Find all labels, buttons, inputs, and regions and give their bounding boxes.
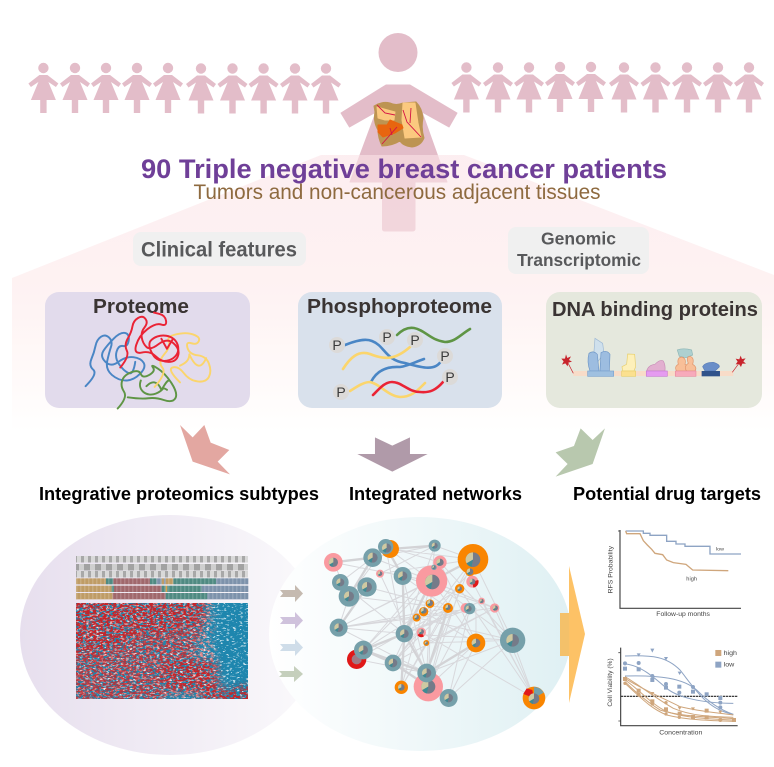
heading: integrated networks: Integrated networks [349, 484, 522, 504]
network nodes [324, 539, 545, 709]
label: genomic transcriptomic: Genomic [541, 228, 616, 248]
chart: survival curve: low [716, 546, 724, 552]
chart: cell viability: Cell Viability (%) [608, 658, 614, 707]
icon: phosphorylated peptides: P [410, 332, 420, 348]
background: pale pyramid [12, 155, 774, 432]
arrow: track arrows to network [279, 585, 303, 682]
icon: phosphorylated peptides [329, 328, 470, 400]
icon: tangled proteins [86, 313, 210, 409]
label: clinical features [133, 232, 306, 266]
icon: central patient figure [341, 33, 457, 231]
icon: phosphorylated peptides: P [332, 337, 342, 353]
panel: subtype ellipse [20, 515, 320, 755]
subtitle: Tumors and non-cancerous adjacent tissues [194, 181, 600, 204]
heading: potential drug targets: Potential drug targets [573, 484, 761, 504]
label: genomic transcriptomic: Transcriptomic [517, 250, 641, 270]
arrow: big orange arrow [560, 566, 585, 703]
icon: tumor tissue [374, 102, 424, 147]
arrow: to networks [357, 437, 428, 472]
icon: phosphorylated peptides: P [440, 348, 450, 364]
icon: phosphorylated peptides: P [336, 384, 346, 400]
heading: phosphoproteome: Phosphoproteome [307, 296, 492, 318]
title: 90 Triple negative breast cancer patients [141, 154, 667, 184]
chart: survival curve: Follow-up months [656, 611, 711, 618]
chart: cell viability: Concentration [659, 730, 703, 737]
network edges thin [333, 546, 534, 698]
arrow: to drug targets [556, 428, 605, 477]
heading: proteome: Proteome [93, 296, 189, 318]
label: clinical features: Clinical features [141, 238, 297, 262]
chart: survival curve [608, 530, 741, 618]
icon: phosphorylated peptides: P [382, 329, 392, 345]
heading: DNA binding proteins: DNA binding proteins [552, 299, 758, 321]
chart: cell viability: high [724, 650, 738, 657]
chart: annotation tracks [76, 556, 248, 599]
network edges thick [333, 546, 476, 687]
icon: row of patients right [451, 62, 764, 112]
icon: phosphorylated peptides: P [445, 369, 455, 385]
chart: survival curve: RFS Probability [608, 545, 615, 593]
panel: DNA binding proteins [546, 292, 762, 408]
label: genomic transcriptomic [508, 227, 649, 274]
chart: cell viability: low [724, 662, 735, 669]
panel: network ellipse [269, 517, 571, 751]
chart: survival curve: high [686, 576, 697, 582]
chart: cell viability [608, 648, 738, 737]
arrow: to subtypes [180, 425, 230, 474]
icon: DNA with bound proteins [561, 338, 746, 376]
icon: row of patients left [28, 63, 341, 114]
heading: integrative proteomics subtypes: Integrative proteomics subtypes [39, 484, 319, 504]
chart: integrated network [324, 539, 545, 709]
chart: proteomics heatmap [76, 603, 248, 699]
panel: proteome [45, 292, 250, 409]
panel: phosphoproteome [298, 292, 502, 408]
